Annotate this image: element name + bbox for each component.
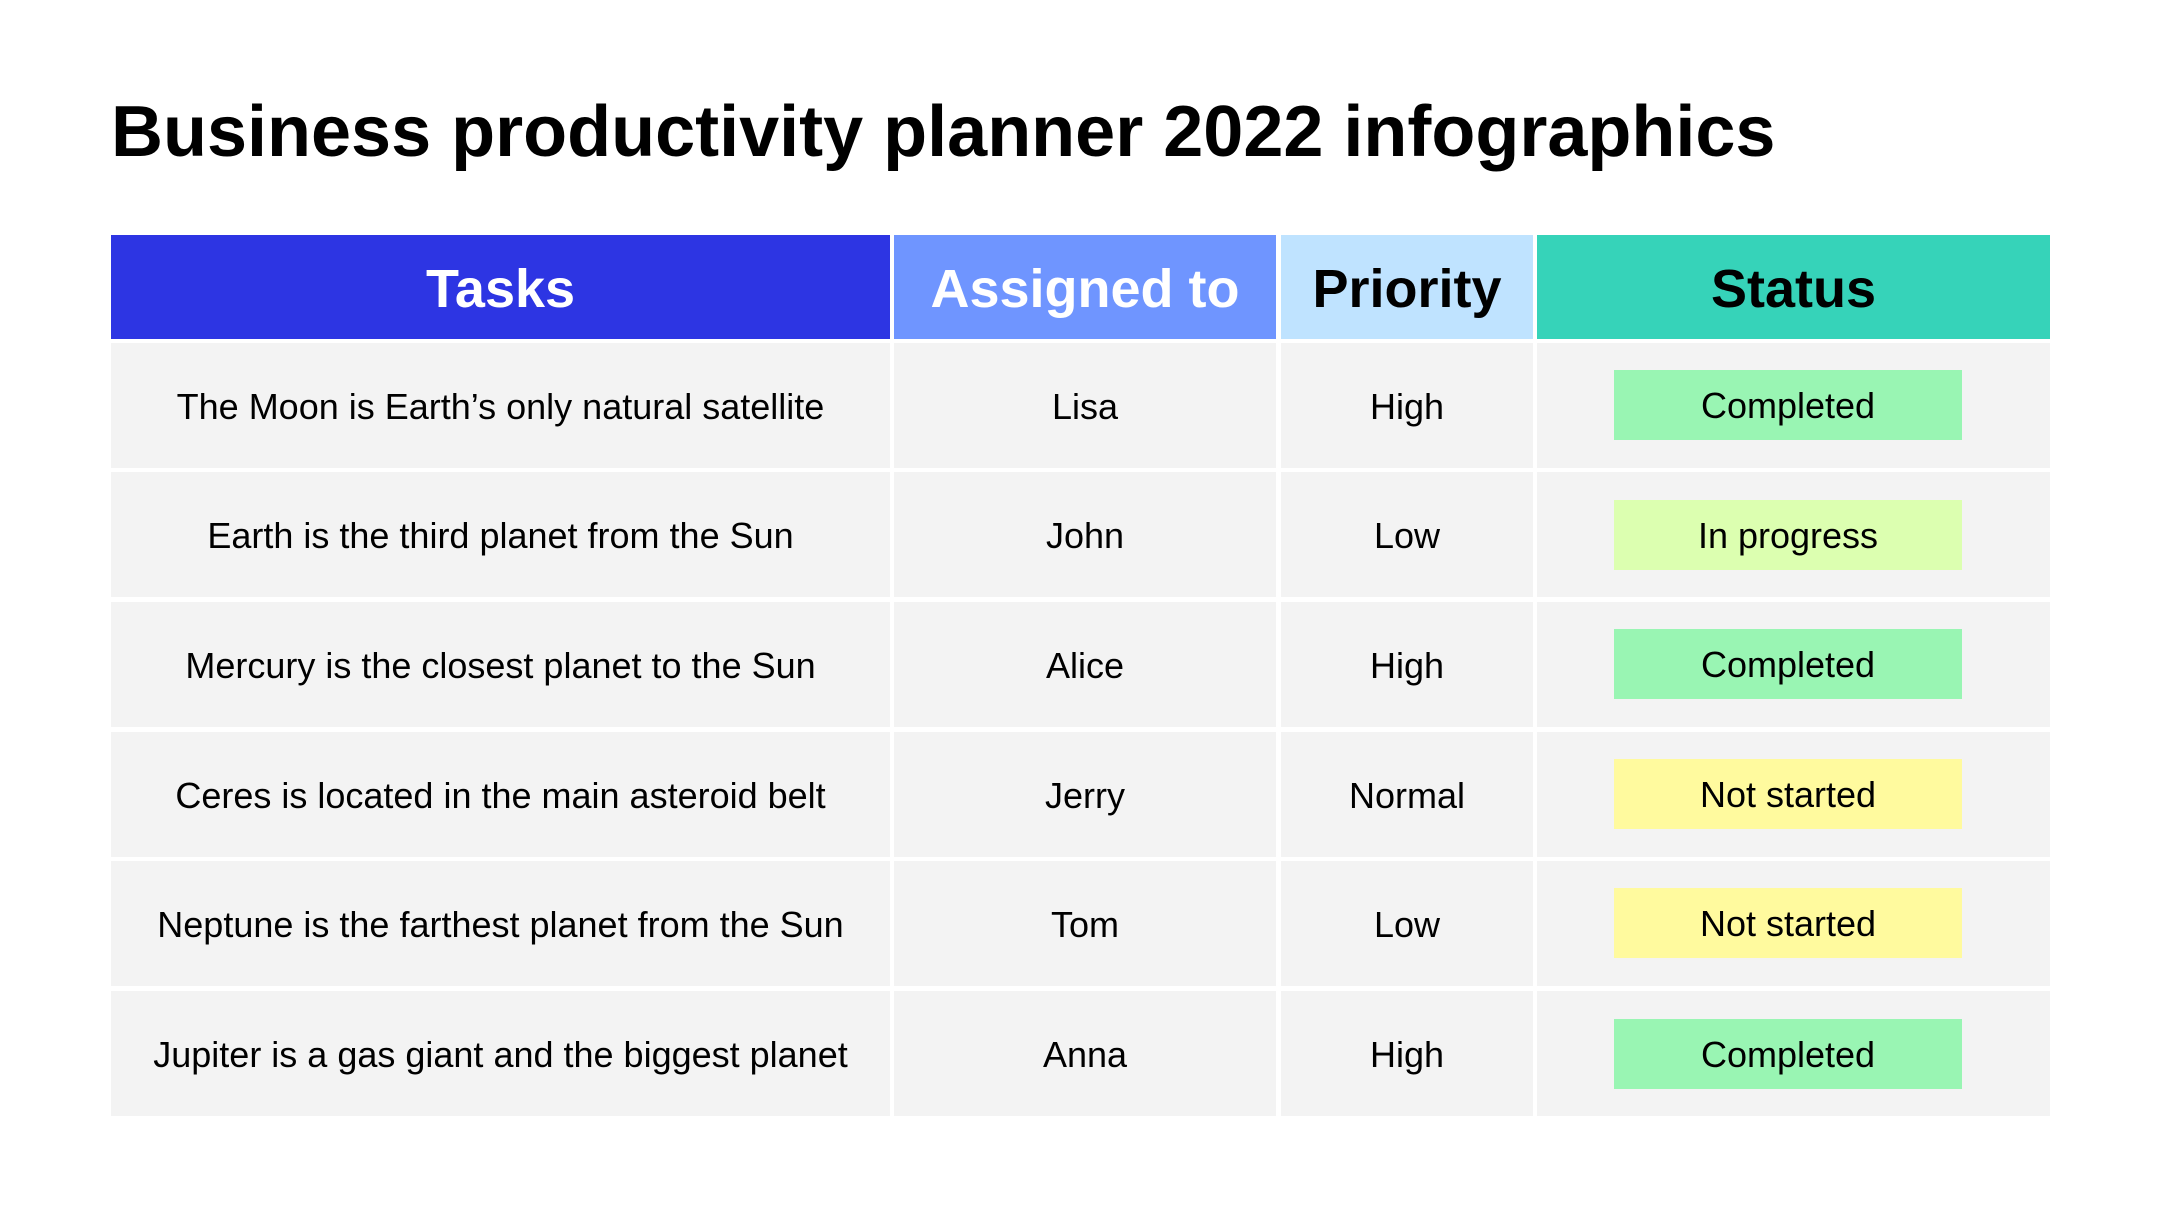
row 2 assignee: John bbox=[1046, 514, 1124, 556]
row 6 status badge bbox=[1614, 1019, 1962, 1089]
row 5 priority: Low bbox=[1374, 904, 1440, 944]
row 2 task: Earth is the third planet from the Sun bbox=[207, 514, 794, 556]
row 4 status cell bbox=[1537, 732, 2050, 857]
row 4 assignee bbox=[894, 732, 1276, 857]
row 3 status cell bbox=[1537, 602, 2050, 727]
row 4 status badge: Not started bbox=[1700, 774, 1876, 815]
table header: Tasks bbox=[111, 235, 890, 339]
row 6 priority: High bbox=[1370, 1034, 1444, 1074]
row 1 priority bbox=[1281, 343, 1533, 468]
table header: Status: Status bbox=[1711, 259, 1876, 319]
row 5 assignee bbox=[894, 861, 1276, 986]
row 6 priority bbox=[1281, 991, 1533, 1116]
row 3 status badge: Completed bbox=[1701, 644, 1875, 685]
row 2 priority: Low bbox=[1374, 514, 1440, 556]
row 1 assignee: Lisa bbox=[1052, 386, 1118, 426]
table header: Assigned to bbox=[894, 235, 1276, 339]
row 4 priority: Normal bbox=[1349, 774, 1465, 816]
row 6 status cell bbox=[1537, 991, 2050, 1116]
row 5 priority bbox=[1281, 861, 1533, 986]
row 6 status badge: Completed bbox=[1701, 1034, 1875, 1075]
row 2 status badge: In progress bbox=[1698, 515, 1878, 556]
row 6 assignee: Anna bbox=[1043, 1034, 1127, 1074]
row 5 status cell bbox=[1537, 861, 2050, 986]
row 2 priority bbox=[1281, 472, 1533, 597]
table header: Priority bbox=[1281, 235, 1533, 339]
row 1 status badge bbox=[1614, 370, 1962, 440]
row 6 assignee bbox=[894, 991, 1276, 1116]
row 3 task: Mercury is the closest planet to the Sun bbox=[185, 644, 816, 686]
row 1 task bbox=[111, 343, 890, 468]
row 2 status cell bbox=[1537, 472, 2050, 597]
row 5 task: Neptune is the farthest planet from the Sun bbox=[157, 904, 844, 944]
row 2 status badge bbox=[1614, 500, 1962, 570]
row 3 priority bbox=[1281, 602, 1533, 727]
row 6 task: Jupiter is a gas giant and the biggest planet bbox=[153, 1034, 848, 1074]
row 4 priority bbox=[1281, 732, 1533, 857]
row 6 task bbox=[111, 991, 890, 1116]
title: Business productivity planner 2022 infographics bbox=[111, 92, 1775, 172]
row 5 status badge bbox=[1614, 888, 1962, 958]
row 3 assignee: Alice bbox=[1046, 644, 1124, 686]
row 5 assignee: Tom bbox=[1051, 904, 1119, 944]
row 5 task bbox=[111, 861, 890, 986]
row 1 priority: High bbox=[1370, 386, 1444, 426]
row 1 status cell bbox=[1537, 343, 2050, 468]
table header: Status bbox=[1537, 235, 2050, 339]
row 2 task bbox=[111, 472, 890, 597]
row 1 task: The Moon is Earth’s only natural satellite bbox=[177, 386, 824, 426]
row 3 assignee bbox=[894, 602, 1276, 727]
table header: Assigned to: Assigned to bbox=[930, 259, 1240, 319]
row 1 status badge: Completed bbox=[1701, 385, 1875, 426]
table header: Tasks: Tasks bbox=[426, 259, 575, 319]
row 5 status badge: Not started bbox=[1700, 903, 1876, 944]
row 3 priority: High bbox=[1370, 644, 1444, 686]
row 2 assignee bbox=[894, 472, 1276, 597]
row 1 assignee bbox=[894, 343, 1276, 468]
table header: Priority: Priority bbox=[1312, 259, 1502, 319]
row 4 task bbox=[111, 732, 890, 857]
row 3 task bbox=[111, 602, 890, 727]
row 3 status badge bbox=[1614, 629, 1962, 699]
row 4 task: Ceres is located in the main asteroid belt bbox=[175, 774, 826, 816]
row 4 status badge bbox=[1614, 759, 1962, 829]
row 4 assignee: Jerry bbox=[1045, 774, 1125, 816]
